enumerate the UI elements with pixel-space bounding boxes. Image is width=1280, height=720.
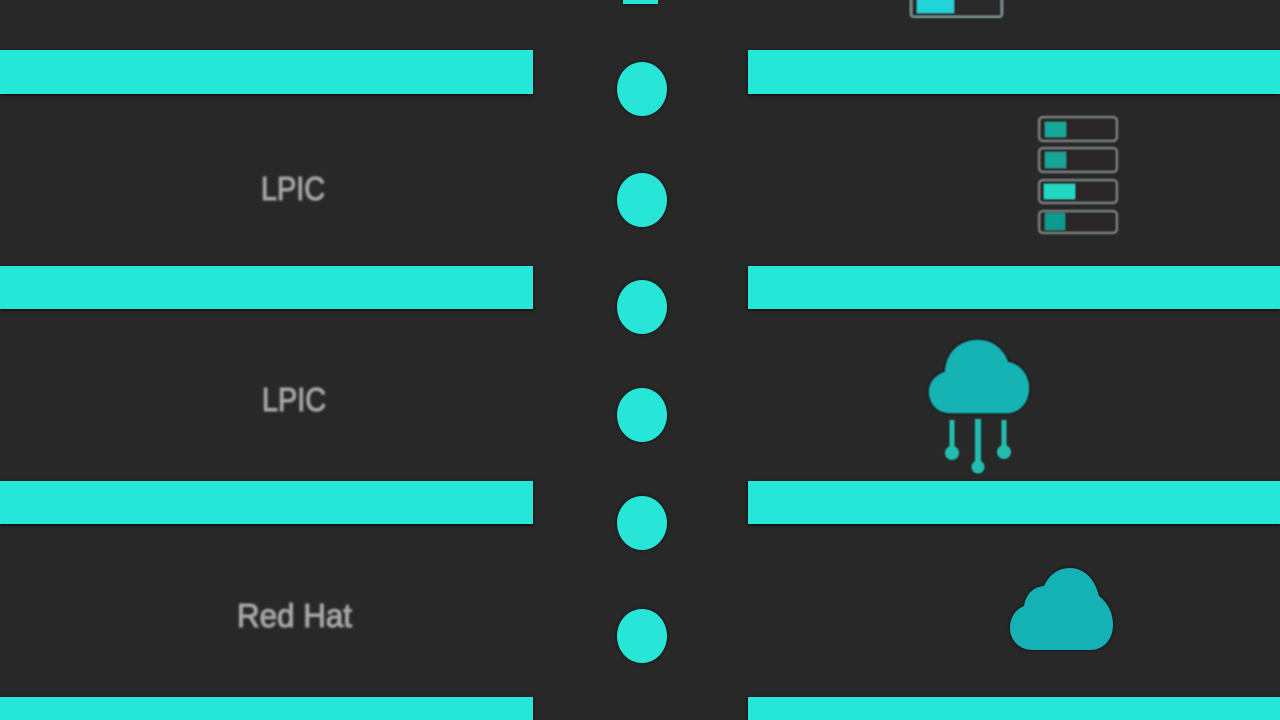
left bars bbox=[0, 50, 533, 720]
right bars bbox=[748, 50, 1280, 720]
timeline dots bbox=[617, 62, 667, 663]
icon: cropped top slider bbox=[911, 0, 1002, 17]
label: Red Hat: Red Hat bbox=[237, 597, 352, 634]
icon: cloud bbox=[1010, 568, 1113, 650]
label: LPIC second: LPIC bbox=[262, 381, 326, 418]
label: LPIC first: LPIC bbox=[261, 170, 325, 207]
top fragment of timeline marker bbox=[623, 0, 658, 4]
icon: cloud with connectors bbox=[929, 340, 1029, 474]
icon: sliders bbox=[1039, 117, 1117, 233]
